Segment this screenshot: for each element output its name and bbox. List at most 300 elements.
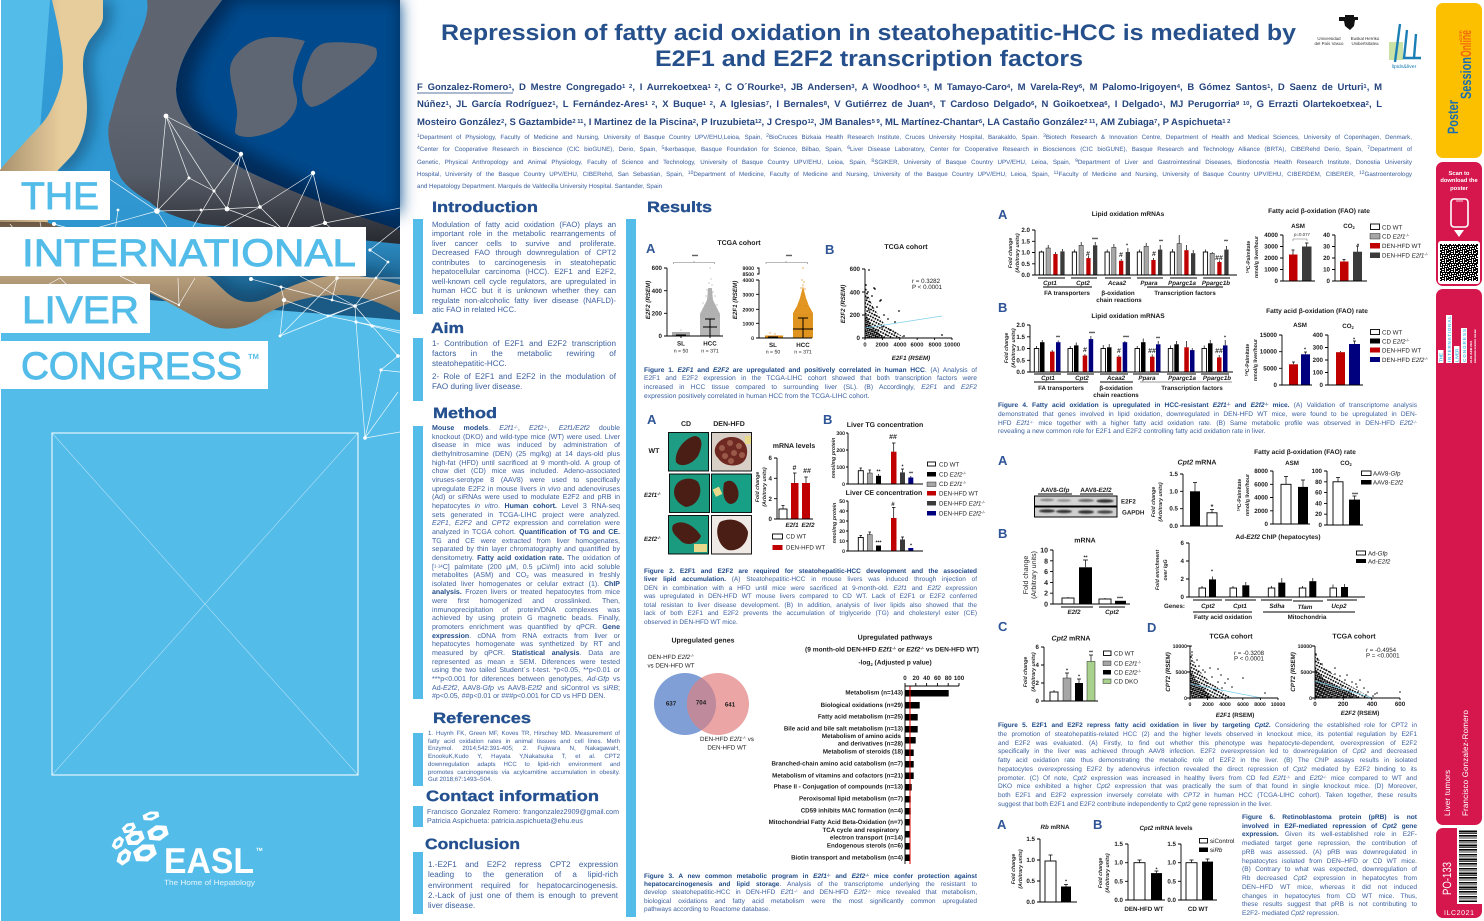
chart: Liver CE concentration: 0: [842, 549, 845, 555]
chart: FAO rate E2f2: 14: [1244, 372, 1248, 376]
text: introduction: important role in the metabolic rearrangements of: [432, 229, 616, 238]
chart: FAO rate AAV8: 20: [1315, 511, 1323, 518]
chart: Liver TG concentration: nmol/mg protein: [831, 438, 837, 478]
figure 3 panels: -/-: [920, 646, 925, 650]
figure 3 panels: or: [896, 646, 906, 654]
chart: FAO rate E2f2: 100: [1313, 370, 1324, 376]
chart: lipid oxidation mRNAs E2f2: FA transporters: [1038, 385, 1084, 392]
chart: E2F2 beeswarm: n = 50: [674, 348, 688, 354]
legend: liver lipids: CD E2f1: [939, 481, 962, 488]
chart: CPT2 vs E2F1 correlation: 0: [1189, 702, 1192, 708]
caption: figure 3: hepatocarcinogenesis and lipid storage. Analysis of the transcriptome underlying the resistant to: [644, 881, 977, 888]
figure 2 panels: B: [823, 412, 832, 427]
legend: E2f2 groups: DEN-HFD E2f2: [1382, 357, 1424, 364]
heading: References: References: [433, 710, 531, 727]
chart: Cpt2 mRNA AAV8: 0.5: [1169, 506, 1179, 513]
text: method: (Ad) or siRNAs were used to modulate E2F2 and pRB in: [432, 494, 620, 501]
chart: E2F1 vs E2F2 correlation: TCGA cohort: [884, 243, 928, 251]
figure 2 panels: [644, 412, 986, 555]
chart: Cpt2 mRNA AAV8: 0.0: [1169, 523, 1179, 530]
logo: EASL: The Home of Hepatology: [164, 878, 255, 887]
chart: ChIP: Tfam: [1298, 604, 1313, 611]
heading: Conclusion: Conclusion: [425, 836, 520, 853]
chart: lipid oxidation mRNAs E2f1: **: [1224, 239, 1229, 245]
text: introduction: hepatocellular carcinoma (HCC). E2F1 and E2F2,: [432, 267, 616, 276]
text: introduction: Modulation of fatty acid oxidation (FAO) plays an: [432, 220, 616, 228]
chart: lipid oxidation mRNAs E2f2: Ppara: [1138, 375, 1156, 382]
figure 3 panels: [647, 634, 979, 864]
chart: lipid oxidation mRNAs E2f1: 1.0: [1021, 250, 1031, 256]
text: method: [432, 424, 620, 700]
chart: Liver CE concentration: [832, 489, 923, 555]
text: conclusion: [428, 860, 618, 910]
caption: figure 5: fatty acid oxidation rate thus demonstrating the metabolic role of E2F2 in the liver. (B) The ChIP assays results in isolated: [998, 757, 1417, 764]
chart: venn diagram: -/-: [690, 653, 695, 658]
chart: lipid oxidation mRNAs E2f2: Ppargc1b: [1203, 375, 1231, 382]
chart: Liver CE concentration: Liver CE concentration: [846, 489, 922, 497]
chart: Cpt2 mRNA knockouts: 2: [1036, 680, 1040, 687]
chart: pathway bars: Branched-chain amino acid catabolism (n=7): [771, 761, 903, 768]
chart: pathway bars: TCA cycle and respiratory: [823, 827, 900, 834]
chart: ChIP: Fatty acid oxidation: [1194, 614, 1252, 621]
chart: pathway bars: and derivatives (n=28): [838, 741, 903, 748]
chart: Rb mRNA: 0.5: [1026, 878, 1036, 885]
brand text: Poster: [1445, 100, 1462, 134]
affiliations: and Hepatology Department. Marqués de Valdecilla University Hospital. Santander, Spain: [417, 183, 662, 190]
chart: E2F2 beeswarm: [645, 254, 723, 354]
chart: E2F1 vs E2F2 correlation: 400: [850, 290, 861, 296]
chart: Cpt2 mRNA knockouts: Fold change: [1023, 657, 1029, 687]
logo: university: [1315, 15, 1380, 46]
text: method: sets generated in TCGA-LIHC project were analyzed.: [432, 512, 620, 519]
chart: mRNA levels: #: [793, 465, 797, 472]
chart: Liver CE concentration: 40: [839, 509, 845, 515]
chart: Rb mRNA: 0.0: [1026, 899, 1036, 906]
text: method: high-fat (HFD) until sacrificed at 9 month-old. A group of: [432, 460, 620, 467]
western blot: AAV8-Gfp: [1041, 487, 1070, 494]
mini congress mark: 23-26 JUNE 2021: [1469, 340, 1473, 363]
caption: figure 2: liver lipid accumulation. (A) Steatohepatitic-HCC in mouse livers was induced through injection of: [644, 576, 977, 583]
authors: Núñez1, JL García Rodríguez1, L Fernández-Ares1 2, X Buque1 2, A Iglesias7, I Bernales8, V Gutiérrez de Juan6, T Cardoso Delgado6, N Goikoetxea6, I Delgado1, MJ Perugorria9 10, G Errazti Olartekoetxea2, L: [417, 99, 1382, 110]
chart: mRNA levels: DEN-HFD WT: [786, 544, 825, 552]
scan prompt: poster: [1450, 186, 1469, 192]
text: introduction: regulate non-alcoholic fatty liver disease (NAFLD)-: [432, 296, 616, 305]
chart: Liver TG concentration: 0: [842, 482, 845, 488]
text: method: ***p<0.001 for diferences between genotypes, Ad-Gfp vs: [432, 676, 620, 683]
caption: figure 5: specifically in the liver was achieved through AAV8 infection. E2F2 overexpression led to downregulation of Cpt2 and decreased: [998, 748, 1417, 755]
text: method: achieved by using protein G magnetic beads. Finally,: [432, 615, 620, 622]
caption: figure 3: [644, 872, 977, 913]
chart: CPT2 vs E2F1 correlation: 4000: [1219, 702, 1231, 708]
figure 6 panels: A: [997, 817, 1007, 832]
caption: figure 4: demonstrated that genes involved in lipid oxidation, downregulated in DEN-HFD WT mice, were found to be upregulated in DEN-: [998, 411, 1417, 418]
chart: Rb mRNA: (Arbitrary units): [1018, 849, 1024, 889]
mini congress mark: LIVER: [1454, 348, 1460, 362]
chart: Liver CE concentration: 20: [839, 529, 845, 535]
text: introduction: atic FAO in related HCC.: [432, 305, 516, 314]
chart: Rb mRNA: Fold change: [1011, 854, 1017, 884]
chart: FAO rate E2f1: CO: [1343, 223, 1353, 230]
chart: CPT2 vs E2F2 correlation: P = <0.0001: [1366, 652, 1400, 660]
chart: lipid oxidation mRNAs E2f1: Acaa2: [1107, 280, 1127, 287]
chart: mRNA levels: E2f1: [785, 522, 799, 529]
text: method: inmunoprecipitation of protein/DNA complexes was: [432, 607, 620, 614]
chart: lipid oxidation mRNAs E2f1: Transcription factors: [1154, 290, 1216, 297]
legend: E2f2 groups: -/-: [1424, 356, 1429, 361]
chart: FAO rate AAV8: CO: [1340, 460, 1350, 467]
chart: E2F1 vs E2F2 correlation: P < 0.0001: [912, 284, 943, 291]
legend: E2f2 groups: [1370, 330, 1429, 364]
chart: CPT2 vs E2F2 correlation: E2F2 (RSEM): [1341, 710, 1379, 717]
chart: FAO rate E2f1: nmol/g liver/hour: [1254, 236, 1260, 278]
chart: mRNA levels: (Arbitrary units): [762, 467, 768, 507]
legend: knockouts: CD E2f1: [1114, 660, 1137, 668]
mini congress mark: BREAKING SCIENCE ONLINE: [1474, 329, 1477, 363]
text: introduction: [432, 220, 616, 314]
caption: figure 2: lack of both E2F1 and E2F2 prevents the accumulation of triglyceride (TG) and cholesteryl ester (CE): [644, 610, 977, 617]
caption: figure 4: revealing a new common role for E2F1 and E2F2 controlling fatty acid oxidation rate in liver.: [998, 428, 1266, 435]
text: method: separated by thin layer chromatography and quantified by: [432, 546, 620, 553]
figure 1 panels: TCGA cohort: [717, 239, 761, 247]
chart: lipid oxidation mRNAs E2f1: #: [1086, 251, 1090, 258]
text: aim 2: 2- Role of E2F1 and E2F2 in the modulation of: [432, 372, 616, 381]
legend: E2f1 groups: [1370, 224, 1429, 260]
legend: liver lipids: DEN-HFD E2f1: [939, 500, 981, 508]
chart: pathway bars: Bile acid and bile salt metabolism (n=13): [784, 726, 903, 733]
mini congress mark: CONGRESS: [1462, 329, 1467, 362]
figure 1 panels: [645, 239, 960, 362]
chart: FAO rate E2f1: *: [1357, 243, 1360, 249]
chart: pathway bars: Biological oxidations (n=29): [821, 702, 903, 709]
affiliations: Hospital, University of the Basque Country UPV/EHU, CIBERehd, San Sebastian, Spain, 10Department of Medicine, Faculty of Medicine and Nursing, University of the Basque Country UPV/EHU, Leioa, Spain, 11Faculty of Medicine and Nursing, University of Basque Country UPV/EHU, CIBERDEM, CIBERER, 12Gastroenterology: [417, 171, 1412, 178]
chart: pathway bars: Phase II - Conjugation of compounds (n=13): [774, 784, 903, 791]
chart: ChIP: Genes:: [1164, 603, 1185, 610]
chart: FAO rate AAV8: 14: [1236, 507, 1240, 511]
logo: university: Unibertsitatea: [1351, 41, 1379, 46]
chart: mRNA AAV8: 2: [1044, 591, 1048, 598]
chart: pathway bars: 100: [954, 675, 965, 682]
chart: mRNA levels: mRNA levels: [773, 442, 815, 450]
icon: phone: [1451, 199, 1468, 237]
chart: lipid oxidation mRNAs E2f1: #: [1119, 252, 1123, 259]
chart: lipid oxidation mRNAs E2f1: Cpt1: [1043, 280, 1057, 287]
chart: Cpt2 mRNA knockouts: *: [1078, 674, 1081, 680]
chart: lipid oxidation mRNAs E2f1: [1008, 227, 1237, 304]
chart: FAO rate E2f2: 10000: [1260, 349, 1278, 356]
chart: lipid oxidation mRNAs E2f1: (Arbitrary units): [1015, 233, 1021, 273]
chart: lipid oxidation mRNAs E2f1: *: [1126, 243, 1129, 249]
chart: E2F1 beeswarm: 9000: [742, 266, 754, 272]
legend: liver lipids: DEN-HFD E2f2: [939, 510, 981, 518]
chart: FAO rate E2f1: 14: [1246, 269, 1250, 273]
chart: E2F1 vs E2F2 correlation: [840, 243, 960, 362]
western blot: [1034, 487, 1145, 517]
chart: ChIP: [1155, 534, 1365, 621]
chart: ChIP: Sdha: [1269, 603, 1285, 610]
affiliations: 1Department of Physiology, Faculty of Medicine and Nursing, University of Basque Country UPV/EHU,Leioa, Spain, 2BioCruces Bizkaia Health Research Institute, Cruces University Hospital, Barakaldo, Spain. 3Biotech Research & Innovation Centre, Department of Health and Medical Sciences, University of Copenhagen, Denmark,: [417, 134, 1412, 141]
chart: pathway bars: Metabolism of vitamins and cofactors (n=21): [772, 773, 903, 780]
chart: FAO rate AAV8: Fatty acid β-oxidation (FAO) rate: [1254, 449, 1356, 456]
chart: FAO rate E2f1: 10: [1323, 266, 1331, 274]
chart: FAO rate E2f2: 5000: [1263, 365, 1278, 372]
chart: Liver TG concentration: ##: [889, 434, 897, 441]
chart: ChIP: *: [1211, 569, 1214, 575]
chart: lipid oxidation mRNAs E2f1: FA transporters: [1044, 290, 1090, 297]
heading: Contact information: Contact information: [426, 788, 599, 805]
logo: EASL: EASL: [164, 840, 254, 881]
chart: mRNA AAV8: 4: [1044, 580, 1048, 587]
chart: FAO rate E2f2: 2: [1352, 325, 1355, 330]
chart: Cpt2 mRNA levels siRb: DEN-HFD WT: [1124, 906, 1164, 913]
text: method: E2F1, E2F2 and CPT2 expression and correlation were: [432, 520, 620, 527]
chart: Liver TG concentration: **: [909, 471, 914, 477]
chart: FAO rate AAV8: [1236, 449, 1363, 529]
chart: FAO rate E2f1: 0: [1275, 278, 1279, 285]
chart: FAO rate AAV8: 40: [1315, 500, 1323, 507]
text: aim 1: factors in the metabolic rewiring of: [432, 349, 616, 358]
chart: venn diagram: vs: [746, 736, 754, 743]
chart: lipid oxidation mRNAs E2f2: Fold change: [1004, 333, 1010, 363]
chart: E2F1 beeswarm: 1000: [742, 322, 754, 328]
chart: CPT2 vs E2F2 correlation: TCGA cohort: [1332, 632, 1376, 640]
chart: lipid oxidation mRNAs E2f1: Ppargc1b: [1202, 280, 1230, 287]
chart: pathway bars: 40: [923, 675, 931, 682]
chart: E2F1 vs E2F2 correlation: 8000: [929, 342, 941, 348]
legend: knockouts: CD E2f2: [1114, 670, 1137, 676]
chart: E2F1 beeswarm: E2F1 (RSEM): [732, 281, 739, 319]
legend: liver lipids: [927, 462, 986, 518]
panel: sidebar poster session: [1436, 3, 1483, 918]
text: method: [1-14C] palmitate (200 µM, 0.5 µCi/ml) into acid soluble: [432, 563, 620, 570]
caption: figure 6: (B) Contrary to what was expected, downregulation of: [1242, 866, 1417, 873]
chart: lipid oxidation mRNAs E2f2: ##: [1148, 348, 1156, 355]
text: method: analysis. Frozen livers or treated hepatocytes from mice: [432, 589, 620, 596]
congress title: TM: [248, 352, 259, 361]
caption: figure 1: E2F1 and E2F2 expression in the TCGA-LIHC cohort showed that both transcription factors were: [644, 375, 977, 382]
caption: figure 4: [998, 402, 1417, 435]
placeholder frame: [52, 433, 358, 775]
chart: Cpt2 mRNA levels siRb: *: [1155, 867, 1158, 873]
chart: pathway bars: Metabolism of steroids (18): [823, 749, 903, 756]
chart: Cpt2 mRNA levels siRb: siRb: [1210, 847, 1223, 854]
caption: figure 2: observed in DEN-HFD WT mice.: [644, 619, 738, 626]
legend: AAV8 groups: [1361, 470, 1404, 486]
figure 2 panels: DEN-HFD: [713, 421, 745, 428]
chart: pathway bars: 0: [903, 675, 907, 682]
caption: figure 6: [1242, 814, 1417, 917]
chart: Liver CE concentration: nmol/mg protein: [832, 503, 838, 543]
chart: mRNA AAV8: Fold change: [1022, 556, 1030, 594]
legend: E2f1 groups: DEN-HFD WT: [1382, 243, 1421, 250]
caption: figure 6: these results suggest that pRB is not contributing to: [1242, 901, 1417, 908]
chart: pathway bars: Mitochondrial Fatty Acid Beta-Oxidation (n=7): [769, 819, 903, 826]
text: method: TG and CE were extracted from liver homogenates,: [432, 538, 620, 545]
chart: FAO rate AAV8: ***: [1352, 492, 1359, 498]
text: aim 1: [432, 339, 616, 368]
chart: mRNA levels: 4: [769, 476, 773, 482]
figure 3 panels: -/-: [892, 646, 897, 650]
chart: FAO rate AAV8: 100: [1312, 468, 1323, 475]
chart: E2F1 beeswarm: 2000: [742, 308, 754, 314]
chart: ChIP: 4: [1181, 558, 1185, 565]
chart: pathway bars: 60: [934, 675, 941, 682]
legend: E2f1 groups: -/-: [1424, 252, 1429, 256]
chart: E2F1 beeswarm: 4000: [742, 278, 754, 284]
legend: E2f1 groups: -/-: [1405, 232, 1410, 238]
chart: Cpt2 mRNA knockouts: (Arbitrary units): [1031, 652, 1037, 692]
legend: knockouts: CD WT: [1114, 650, 1134, 658]
chart: FAO rate E2f2: nmol/g liver/hour: [1253, 339, 1259, 381]
figure 3 panels: Upregulated genes: [671, 636, 735, 644]
chart: E2F1 vs E2F2 correlation: r = 0.3282: [912, 278, 941, 285]
chart: Liver CE concentration: #: [891, 501, 895, 508]
caption: figure 2: [644, 568, 978, 626]
chart: FAO rate AAV8: 80: [1315, 479, 1323, 486]
chart: ChIP: Cpt1: [1233, 603, 1247, 610]
legend: ChIP groups: Ad-E2f2: [1368, 558, 1391, 566]
figure 4 panels: B: [998, 300, 1007, 315]
chart: FAO rate E2f2: [1244, 308, 1368, 389]
chart: CPT2 vs E2F2 correlation: 200: [1338, 701, 1349, 708]
legend: knockouts: -/-: [1137, 660, 1142, 664]
chart: mRNA levels: 0: [769, 516, 773, 523]
figure 3 panels: (9 month-old DEN-HFD E2f1: [805, 646, 892, 654]
chart: lipid oxidation mRNAs E2f2: ##: [1215, 348, 1223, 355]
title: E2F1 and E2F2 transcription factors: [655, 46, 1083, 71]
chart: CPT2 vs E2F2 correlation: CPT2 (RSEM): [1290, 652, 1297, 692]
chart: lipid oxidation mRNAs E2f2: *: [1224, 335, 1227, 341]
chart: FAO rate AAV8: 4000: [1254, 494, 1269, 502]
chart: mRNA levels: CD WT: [786, 534, 806, 540]
text: introduction: contributes to carcinogenesis in steatohepatic: [432, 258, 616, 267]
chart: mRNA levels: E2f2: [801, 522, 815, 529]
caption: figure 6: DEN–HFD WT mice, whereas it did not induced: [1242, 884, 1417, 891]
chart: E2F1 vs E2F2 correlation: 0: [857, 335, 861, 342]
chart: E2F2 beeswarm: 600: [652, 265, 663, 272]
chart: FAO rate E2f2: 300: [1313, 344, 1324, 352]
chart: lipid oxidation mRNAs E2f2: Ppargc1a: [1168, 375, 1196, 382]
congress title: CONGRESS: [21, 345, 242, 388]
chart: Cpt2 mRNA AAV8: 1.0: [1169, 488, 1179, 495]
chart: Liver CE concentration: ***: [875, 540, 883, 546]
chart: FAO rate E2f1: ASM: [1291, 223, 1305, 230]
chart: Cpt2 mRNA levels siRb: 1.0: [1114, 860, 1124, 867]
chart: FAO rate E2f2: Fatty acid β-oxidation (FAO) rate: [1266, 308, 1368, 315]
chart: FAO rate E2f2: C-Palmitate: [1245, 344, 1251, 372]
chart: lipid oxidation mRNAs E2f2: ***: [1123, 335, 1130, 341]
caption: figure 6: involved in E2F-mediated repression of Cpt2 gene: [1242, 823, 1417, 830]
chart: venn diagram: 641: [725, 702, 736, 708]
figure 3 panels: -log: [858, 660, 870, 666]
chart: E2F1 beeswarm: n = 371: [794, 350, 812, 356]
chart: Cpt2 mRNA levels siRb: Cpt2 mRNA levels: [1139, 825, 1193, 832]
text: references: fatty acid oxidation rates in animal tissues and cell lines. Meth: [428, 738, 620, 745]
chart: FAO rate E2f1: 3000: [1264, 244, 1279, 250]
chart: pathway bars: Metabolism (n=143): [845, 690, 903, 697]
chart: pathway bars: [769, 675, 965, 864]
caption: figure 3: develop steatohepatitic-HCC in DEN-HFD E2f1-/- and DEN-HFD E2f2-/- mice revealed that metabolism,: [644, 889, 977, 896]
chart: ChIP: Mitochondria: [1288, 614, 1327, 621]
chart: FAO rate E2f1: 20: [1323, 255, 1331, 262]
legend: E2f2 groups: DEN-HFD WT: [1382, 348, 1421, 354]
figure 2 panels: A: [647, 412, 657, 427]
chart: FAO rate E2f1: 2000: [1264, 255, 1279, 262]
chart: FAO rate AAV8: 2: [1350, 462, 1353, 467]
chart: CPT2 vs E2F2 correlation: 0: [1309, 696, 1312, 702]
chart: CPT2 vs E2F1 correlation: 0: [1184, 696, 1187, 702]
chart: Cpt2 mRNA AAV8: [1151, 460, 1223, 530]
chart: Cpt2 mRNA AAV8: Cpt2 mRNA: [1178, 460, 1216, 466]
figure 3 panels: Upregulated pathways: [858, 634, 932, 642]
chart: venn diagram: DEN-HFD E2f1: [700, 736, 742, 743]
chart: CPT2 vs E2F2 correlation: 400: [1367, 701, 1378, 708]
mini congress mark: THE: [1438, 353, 1444, 362]
caption: figure 4: HFD E2f1-/- mice together with a higher fatty acid oxidation rate. (B) Same metabolic profile was observed in DEN-HFD E2f2-/-: [998, 419, 1417, 427]
figure 1 panels: A: [646, 241, 656, 256]
text: method: analyzed in TCGA cohort. Quantification of TG and CE.: [432, 529, 620, 536]
chart: CPT2 vs E2F1 correlation: 6000: [1237, 702, 1249, 708]
figure 2 panels: E2f1: [644, 492, 657, 499]
chart: FAO rate E2f2: 200: [1313, 357, 1324, 364]
chart: E2F1 beeswarm: [732, 254, 813, 356]
caption: figure 3: biological oxidations and fatty acid metabolism were the most significantly common upregulated: [644, 898, 977, 905]
chart: FAO rate AAV8: ASM: [1285, 460, 1299, 467]
chart: venn diagram: DEN-HFD E2f2: [648, 654, 690, 661]
caption: figure 2: DEN in combination with a HFD until mice were sacrificed at 9-month-old. E2f1 and E2f2 expression: [644, 585, 977, 592]
chart: lipid oxidation mRNAs E2f2: Cpt1: [1041, 375, 1055, 382]
chart: lipid oxidation mRNAs E2f1: **: [1159, 239, 1164, 245]
legend: E2f2 groups: CD E2f2: [1382, 338, 1405, 346]
chart: E2F1 vs E2F2 correlation: 600: [850, 266, 861, 273]
chart: E2F1 vs E2F2 correlation: 0: [863, 342, 867, 348]
chart: mRNA AAV8: 0: [1044, 602, 1048, 608]
chart: FAO rate E2f2: CO: [1342, 323, 1352, 330]
chart: mRNA AAV8: ***: [1117, 596, 1124, 602]
caption: figure 6: Rb decreased Cpt2 expression in hepatocytes from: [1242, 875, 1417, 882]
text: aim 2: [432, 372, 616, 391]
chart: lipid oxidation mRNAs E2f1: ***: [1092, 237, 1099, 243]
chart: Cpt2 mRNA knockouts: *: [1066, 668, 1069, 674]
chart: ChIP: 6: [1181, 540, 1185, 547]
chart: CPT2 vs E2F1 correlation: 2000: [1202, 702, 1214, 708]
figure 3 panels: E2f2: [906, 646, 921, 654]
text: method: using the two tailed Student´s t-test. *p<0.05, **p<0.01 or: [432, 667, 620, 674]
chart: E2F2 beeswarm: SL: [677, 340, 685, 348]
chart: pathway bars: 80: [945, 675, 952, 682]
chart: E2F1 vs E2F2 correlation: 200: [850, 312, 861, 319]
legend: E2f1 groups: DEN-HFD E2f1: [1382, 252, 1424, 260]
chart: lipid oxidation mRNAs E2f1: Fold change: [1008, 238, 1014, 268]
legend: knockouts: [1103, 650, 1142, 686]
chart: CPT2 vs E2F2 correlation: 0: [1313, 701, 1317, 708]
chart: Liver TG concentration: 200: [836, 448, 845, 454]
chart: E2F2 beeswarm: n = 371: [701, 348, 719, 354]
chart: lipid oxidation mRNAs E2f1: ##: [1215, 255, 1223, 262]
logo: EASL: [110, 810, 263, 887]
text: method: diethylnitrosamine (DEN) (25 mg/kg) at 14 days-old plus: [432, 451, 620, 458]
title: Repression of fatty acid oxidation in steatohepatitic-HCC is mediated by: [441, 20, 1297, 45]
chart: mRNA AAV8: (Arbitrary units): [1030, 551, 1038, 599]
scan prompt: [1440, 170, 1478, 192]
figure 5 panels: [998, 449, 1406, 719]
chart: ChIP: Fold enrichment: [1155, 550, 1161, 590]
text: contact information: [427, 808, 619, 825]
text: aim 2: FAO during liver disease.: [432, 382, 522, 391]
chart: mRNA AAV8: 10: [1040, 548, 1048, 554]
legend: E2f2 groups: CD WT: [1382, 330, 1402, 336]
heading: Method: Method: [433, 405, 497, 422]
logo: university: del País Vasco: [1315, 41, 1344, 46]
